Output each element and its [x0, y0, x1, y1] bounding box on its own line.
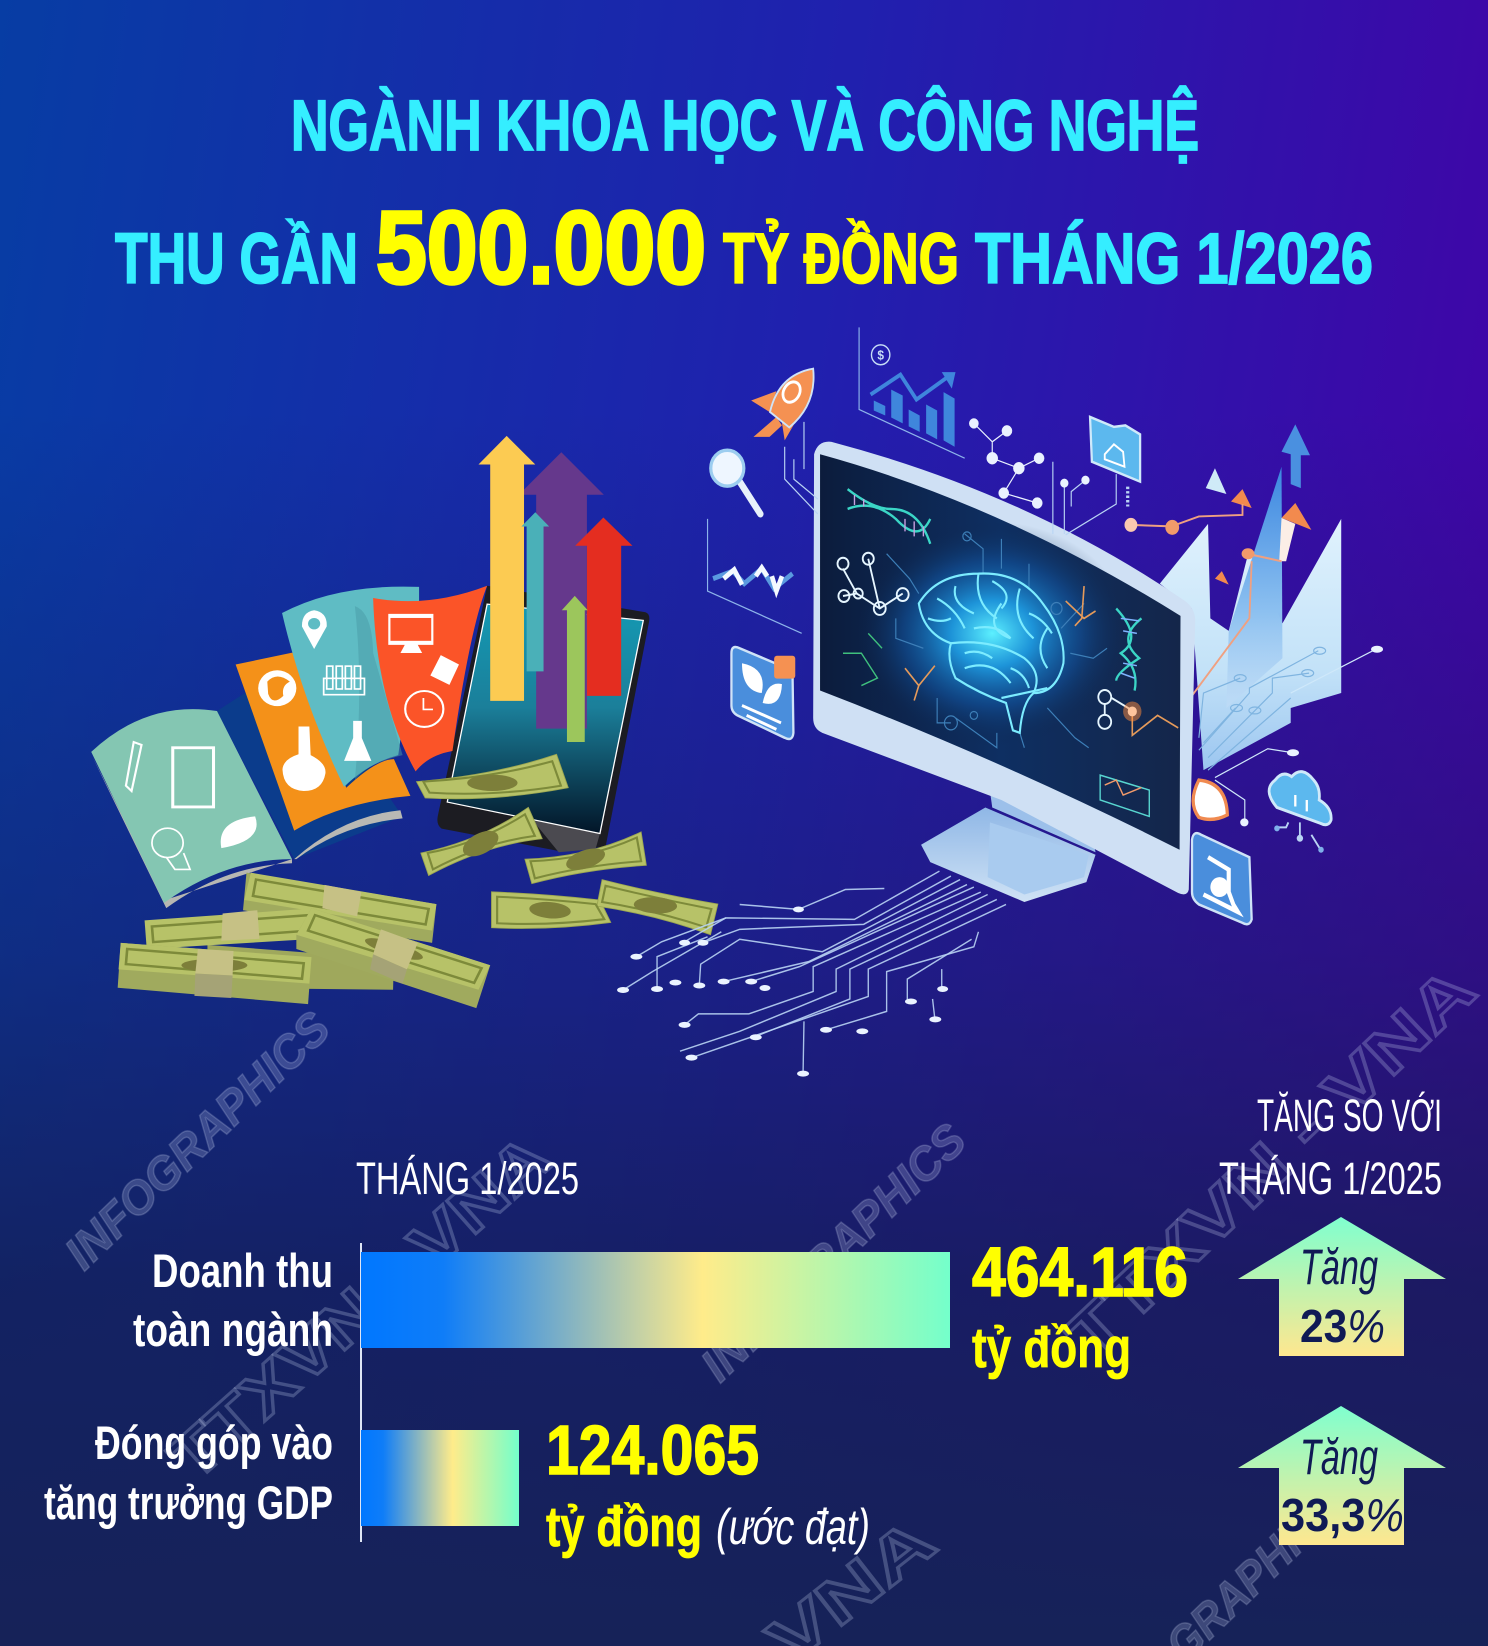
icon: folder [1090, 417, 1140, 482]
growth arrows [478, 436, 632, 742]
DNA helix right [1116, 608, 1141, 691]
icon: rocket [751, 369, 814, 440]
title line 2: 500.000 [376, 190, 706, 305]
row 2 value: (ước đạt) [716, 1499, 870, 1555]
chart: revenue comparison [44, 1153, 1188, 1559]
monitor [813, 442, 1195, 894]
column heading: January 2025: THÁNG 1/2025 [356, 1153, 579, 1204]
watermarks: INFOGRAPHICS [54, 1001, 340, 1279]
board circuit traces [1199, 646, 1383, 826]
money stacks [118, 873, 490, 1008]
watermarks: TTXVN - VNA [1052, 952, 1488, 1372]
illustration: AI computer with science icons [617, 327, 1383, 1077]
open book [91, 586, 487, 908]
row 2 label: Đóng góp vào [95, 1416, 333, 1469]
translucent rising chart [1124, 424, 1341, 770]
DNA helix top [848, 489, 930, 544]
row 2 label: tăng trưởng GDP [44, 1476, 333, 1529]
row 2 label [44, 1416, 333, 1529]
title line 2: THÁNG 1/2026 [975, 220, 1373, 299]
row 1 bar [361, 1252, 950, 1348]
faint screen traces [887, 532, 1107, 748]
tablet [437, 586, 649, 852]
molecules [837, 553, 1132, 729]
book icons [126, 610, 459, 869]
circuit lines [617, 871, 1006, 1077]
flying banknotes [416, 754, 718, 935]
title [115, 86, 1373, 305]
row 2 value: 124.065 [546, 1411, 759, 1489]
arrow: increase 33.3%: Tăng [1300, 1429, 1378, 1485]
axis line [360, 1243, 362, 1542]
row 2 value: tỷ đồng [546, 1495, 702, 1559]
icon: magnifier [711, 450, 760, 514]
row 1 label: toàn ngành [133, 1303, 333, 1356]
row 1 value [972, 1233, 1188, 1380]
arrow: increase 23% [1238, 1217, 1446, 1356]
chart on screen [1100, 775, 1149, 816]
icon: plant card [731, 647, 795, 739]
arrow: increase 23%: Tăng [1300, 1239, 1378, 1295]
row 1 label: Doanh thu [152, 1244, 333, 1297]
orange ring [1193, 780, 1227, 819]
title line 2: THU GẦN [115, 220, 358, 299]
arrow: increase 33.3%: 33,3% [1281, 1489, 1404, 1541]
icon: molecule [969, 418, 1044, 508]
title line 2 [115, 190, 1373, 305]
arrow: increase 33.3% [1238, 1406, 1446, 1545]
watermarks [54, 952, 1488, 1646]
monitor stand [921, 758, 1096, 902]
row 2 bar [361, 1430, 519, 1526]
icon: cloud [1269, 772, 1331, 853]
illustration: books, money and growth arrows [91, 436, 718, 1008]
title line 2: TỶ ĐỒNG [723, 220, 959, 299]
increase comparison column [1219, 1090, 1446, 1545]
arrow: increase 23%: 23% [1300, 1300, 1385, 1352]
brain [919, 573, 1064, 733]
icon: line graph [708, 519, 802, 633]
watermarks: TTXVN - VNA [155, 1120, 564, 1494]
column heading: increase vs January 2025 [1219, 1090, 1442, 1204]
icon: chart with dollar [859, 327, 965, 458]
row 2 value [546, 1411, 870, 1559]
connector lines [785, 422, 1128, 535]
icon: robot arm card [1192, 833, 1252, 924]
icon: chart with dollar: $ [877, 348, 884, 363]
row 1 label [133, 1244, 333, 1356]
row 1 value: 464.116 [972, 1233, 1188, 1311]
row 1 value: tỷ đồng [972, 1316, 1131, 1380]
watermarks: INFOGRAPHICS [690, 1113, 976, 1391]
